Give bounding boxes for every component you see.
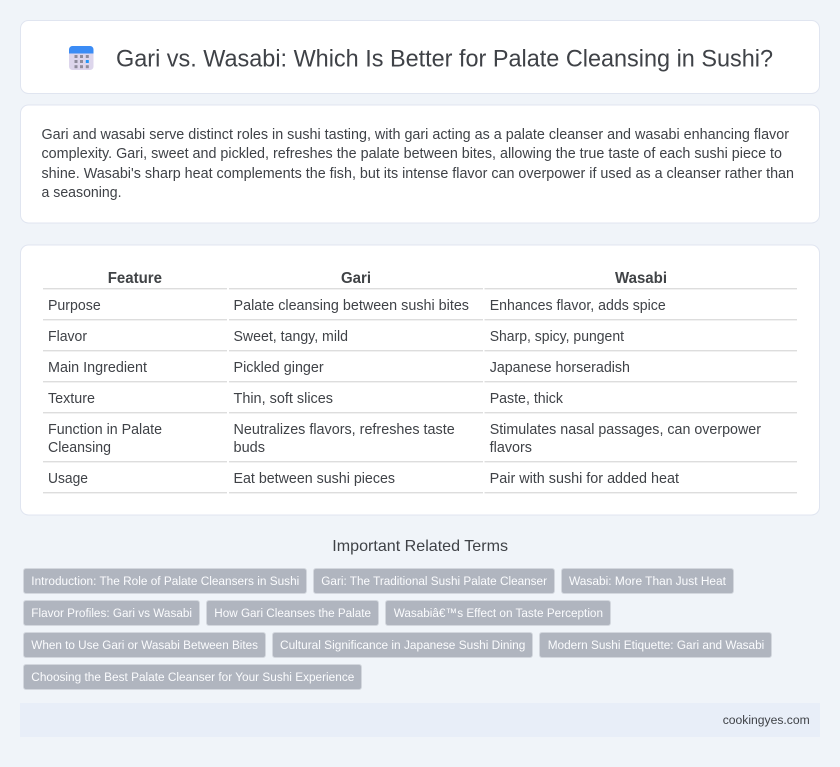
tag: [24, 568, 306, 594]
table header: [108, 270, 667, 287]
row: texture: Texture: [48, 391, 95, 407]
source credit: cookingyes.com: [723, 713, 810, 727]
panel: related term tags: [24, 568, 772, 690]
row: flavor: Sharp, spicy, pungent: [490, 329, 624, 345]
tag: [206, 600, 378, 626]
row: flavor: Flavor: [48, 329, 87, 345]
row: usage: Pair with sushi for added heat: [490, 471, 679, 487]
panel: comparison table: [20, 245, 820, 515]
tag: [540, 632, 772, 658]
row: usage: Eat between sushi pieces: [234, 471, 395, 487]
intro text: shine. Wasabi's sharp heat complements the fish, but its intense flavor can overpower if used as a cleanser rather than: [42, 166, 794, 182]
intro text: [42, 127, 794, 201]
tag: Introduction: The Role of Palate Cleansers in Sushi: [31, 574, 299, 588]
intro text: complexity. Gari, sweet and pickled, refreshes the palate between bites, allowing the true taste of each sushi piece to: [42, 146, 782, 162]
table header: Gari: [341, 270, 371, 287]
row: purpose: Enhances flavor, adds spice: [490, 298, 666, 314]
icon: calendar: [69, 46, 94, 70]
table header: Feature: [108, 270, 162, 287]
row: texture: [48, 391, 564, 407]
intro text: a seasoning.: [42, 185, 122, 201]
row: purpose: [48, 298, 666, 314]
tag: Flavor Profiles: Gari vs Wasabi: [31, 606, 192, 620]
row: function in palate cleansing: buds: [234, 440, 265, 456]
tag: Choosing the Best Palate Cleanser for Your Sushi Experience: [31, 670, 354, 684]
row: purpose: Palate cleansing between sushi bites: [234, 298, 469, 314]
row: function in palate cleansing: flavors: [490, 440, 532, 456]
tag: [562, 568, 734, 594]
row: function in palate cleansing: Neutralizes flavors, refreshes taste: [234, 422, 455, 438]
row: texture: Thin, soft slices: [234, 391, 333, 407]
tag: [24, 632, 266, 658]
row: texture: Paste, thick: [490, 391, 564, 407]
tag: [24, 600, 200, 626]
intro text: Gari and wasabi serve distinct roles in sushi tasting, with gari acting as a palate cleanser and wasabi enhancing flavor: [42, 127, 789, 143]
row: flavor: [48, 329, 624, 345]
panel: header: [20, 20, 820, 94]
row: function in palate cleansing: Function in Palate: [48, 422, 162, 438]
tag: [24, 664, 362, 690]
tag: [314, 568, 554, 594]
tag: Wasabi: More Than Just Heat: [569, 574, 727, 588]
tag: How Gari Cleanses the Palate: [214, 606, 371, 620]
tag: [386, 600, 610, 626]
title: Gari vs. Wasabi: Which Is Better for Palate Cleansing in Sushi?: [116, 46, 773, 73]
row: usage: [48, 471, 679, 487]
tag: Cultural Significance in Japanese Sushi Dining: [280, 638, 525, 652]
row: main ingredient: [48, 360, 630, 376]
tag: When to Use Gari or Wasabi Between Bites: [31, 638, 258, 652]
row: main ingredient: Pickled ginger: [234, 360, 324, 376]
tag: Modern Sushi Etiquette: Gari and Wasabi: [548, 638, 764, 652]
tag: Gari: The Traditional Sushi Palate Cleanser: [321, 574, 547, 588]
tag: [272, 632, 532, 658]
table header: Wasabi: [615, 270, 667, 287]
row: main ingredient: Japanese horseradish: [490, 360, 630, 376]
row: main ingredient: Main Ingredient: [48, 360, 147, 376]
footer: [20, 703, 820, 737]
heading: related terms: Important Related Terms: [332, 538, 508, 555]
row: flavor: Sweet, tangy, mild: [234, 329, 348, 345]
row: function in palate cleansing: Stimulates nasal passages, can overpower: [490, 422, 761, 438]
row: function in palate cleansing: [48, 422, 761, 456]
row: function in palate cleansing: Cleansing: [48, 440, 111, 456]
panel: intro paragraph: [20, 105, 820, 223]
row: purpose: Purpose: [48, 298, 101, 314]
tag: Wasabiâ€™s Effect on Taste Perception: [394, 606, 603, 620]
row: usage: Usage: [48, 471, 88, 487]
